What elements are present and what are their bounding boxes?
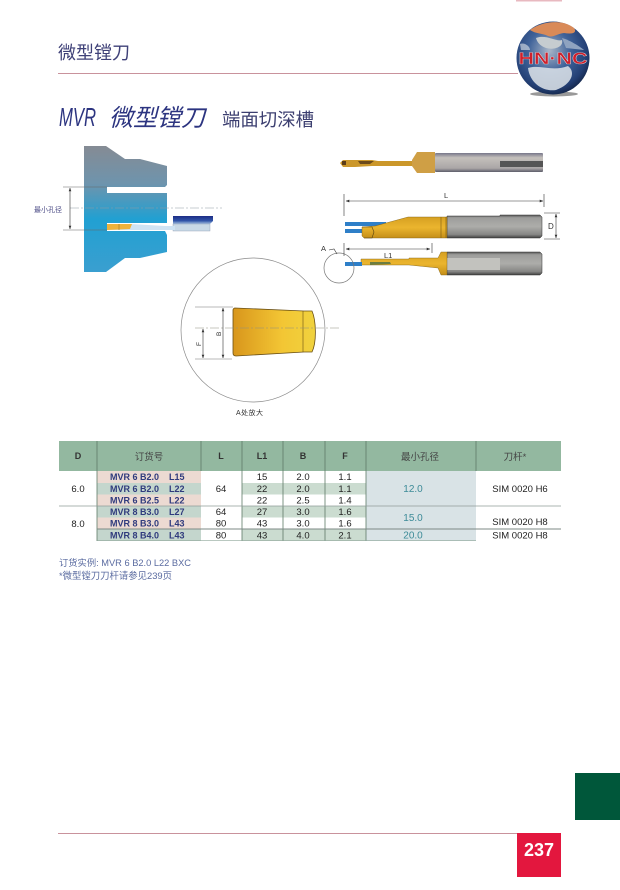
numeric columns: 1.6 [338, 518, 352, 530]
dimension: minimum bore [63, 187, 107, 230]
numeric columns: 22 [257, 496, 267, 506]
header rule [58, 73, 518, 74]
holder column: SIM 0020 H8 [492, 530, 548, 542]
diagram: enlarged detail A [181, 258, 340, 417]
order codes: MVR 8 B3.0 [110, 518, 159, 528]
numeric columns: 15 [257, 472, 267, 483]
order codes: MVR 8 B3.0 [110, 507, 159, 517]
order codes: L15 [169, 472, 185, 482]
dimension D [544, 213, 560, 239]
product title: 微型镗刀 [109, 105, 208, 132]
order codes: L27 [169, 507, 185, 517]
order codes: L22 [169, 496, 185, 506]
numeric columns: 2.5 [296, 496, 310, 506]
numeric columns: 2.0 [296, 472, 310, 483]
table header: D [75, 451, 82, 461]
page number [517, 833, 561, 877]
diagram: tool top view [321, 243, 542, 283]
gold insert [107, 224, 132, 230]
numeric columns: 3.0 [296, 507, 310, 518]
label F: F [196, 342, 203, 346]
dimension L [344, 194, 544, 216]
table header [59, 441, 561, 471]
page number: 237 [524, 840, 554, 860]
numeric columns: 1.6 [338, 507, 352, 518]
minimum bore column: 12.0 [403, 484, 423, 495]
table header: L1 [257, 451, 267, 461]
label A: A [321, 244, 326, 253]
section colour tab [575, 773, 620, 820]
shank [447, 215, 542, 238]
numeric columns: 64 [216, 484, 226, 495]
table header: 刀杆* [504, 451, 527, 463]
order codes: L43 [169, 530, 185, 540]
cutting flow line [345, 262, 362, 266]
numeric columns: 80 [216, 518, 226, 530]
product title [59, 102, 314, 132]
numeric columns: 43 [257, 530, 267, 542]
order codes: L43 [169, 518, 185, 528]
tool neck [107, 224, 175, 230]
product title: MVR [59, 102, 96, 132]
order codes [110, 472, 185, 540]
label L1: L1 [384, 251, 392, 260]
insert [233, 308, 315, 356]
gold cutting part [362, 217, 447, 238]
table: specifications [59, 441, 561, 542]
detail caption: A处放大 [236, 408, 263, 417]
dimension L1 [329, 243, 432, 256]
numeric columns: 27 [257, 507, 267, 518]
table header: F [342, 451, 348, 461]
shank [447, 252, 542, 275]
diagram: tool in workpiece [34, 146, 222, 272]
label L: L [444, 191, 448, 200]
minimum bore column: 20.0 [403, 530, 423, 542]
product subtitle: 端面切深槽 [222, 110, 314, 130]
holder column: SIM 0020 H8 [492, 517, 548, 528]
table header: L [218, 451, 224, 461]
logo: HN-NC globe [516, 22, 590, 96]
row shading [97, 471, 476, 541]
order codes: L22 [169, 484, 185, 494]
holder column [492, 484, 548, 542]
note: holder reference: *微型镗刀刀杆请参见239页 [59, 570, 172, 582]
label B: B [216, 332, 223, 336]
centre line [195, 327, 340, 329]
page heading: 微型镗刀 [58, 43, 130, 63]
footer rule [58, 833, 517, 834]
numeric columns: 4.0 [296, 530, 310, 542]
table header: 订货号 [135, 451, 163, 463]
numeric columns: 22 [257, 484, 267, 495]
table header: B [300, 451, 307, 461]
logo wordmark: HN·NC [518, 49, 588, 68]
top page tab [516, 0, 562, 2]
numeric columns [216, 472, 352, 542]
table grid [59, 441, 561, 541]
photo: tool 3D view [340, 152, 543, 173]
order codes: MVR 6 B2.5 [110, 496, 159, 506]
numeric columns: 2.0 [296, 484, 310, 495]
holder [173, 216, 213, 224]
order codes: MVR 8 B4.0 [110, 530, 159, 540]
order codes: MVR 6 B2.0 [110, 472, 159, 482]
numeric columns: 80 [216, 530, 226, 542]
gold neck and head [361, 252, 447, 275]
label D: D [548, 222, 554, 231]
detail circle A [324, 253, 354, 283]
minimum bore column [403, 484, 423, 542]
numeric columns: 3.0 [296, 518, 310, 530]
dimension B and F [195, 307, 233, 359]
minimum bore column: 15.0 [403, 513, 423, 524]
holder column: SIM 0020 H6 [492, 484, 548, 495]
numeric columns: 2.1 [338, 530, 352, 542]
numeric columns: 43 [257, 518, 267, 530]
D column: 6.0 [71, 484, 85, 495]
cutting flow lines [345, 222, 386, 226]
centre line [70, 207, 222, 209]
diagram: tool side view [344, 191, 560, 239]
table header: 最小孔径 [401, 451, 439, 463]
numeric columns: 1.4 [338, 496, 352, 506]
order codes: MVR 6 B2.0 [110, 484, 159, 494]
note: order example: 订货实例: MVR 6 B2.0 L22 BXC [59, 557, 192, 568]
D column [71, 484, 85, 530]
minimum bore label: 最小孔径 [34, 205, 62, 214]
numeric columns: 64 [216, 507, 226, 518]
workpiece section [84, 146, 167, 272]
D column: 8.0 [71, 519, 85, 530]
numeric columns: 1.1 [338, 472, 352, 483]
numeric columns: 1.1 [338, 484, 352, 495]
